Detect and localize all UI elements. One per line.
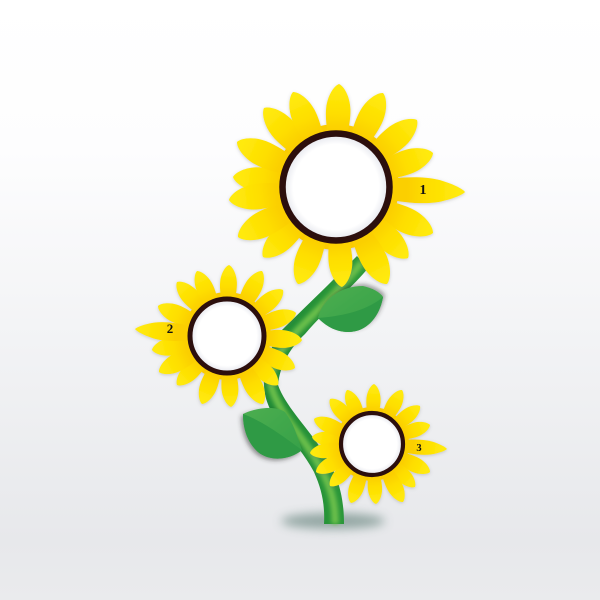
leaf lower [243, 408, 302, 459]
petals 1 [227, 84, 465, 290]
number 1: 1 [420, 183, 426, 198]
ring 2 [190, 299, 264, 373]
flower 1 [227, 84, 465, 290]
number 3: 3 [416, 443, 422, 454]
petals 2 [134, 265, 302, 408]
flower 3 [309, 384, 447, 506]
flower 2 [134, 265, 302, 408]
ring 3 [341, 413, 403, 475]
petals 3 [309, 384, 447, 506]
number 2: 2 [167, 321, 173, 336]
ground shadow [281, 513, 385, 529]
stem [264, 256, 368, 524]
ring 1 [282, 134, 390, 240]
leaf upper [318, 286, 383, 332]
